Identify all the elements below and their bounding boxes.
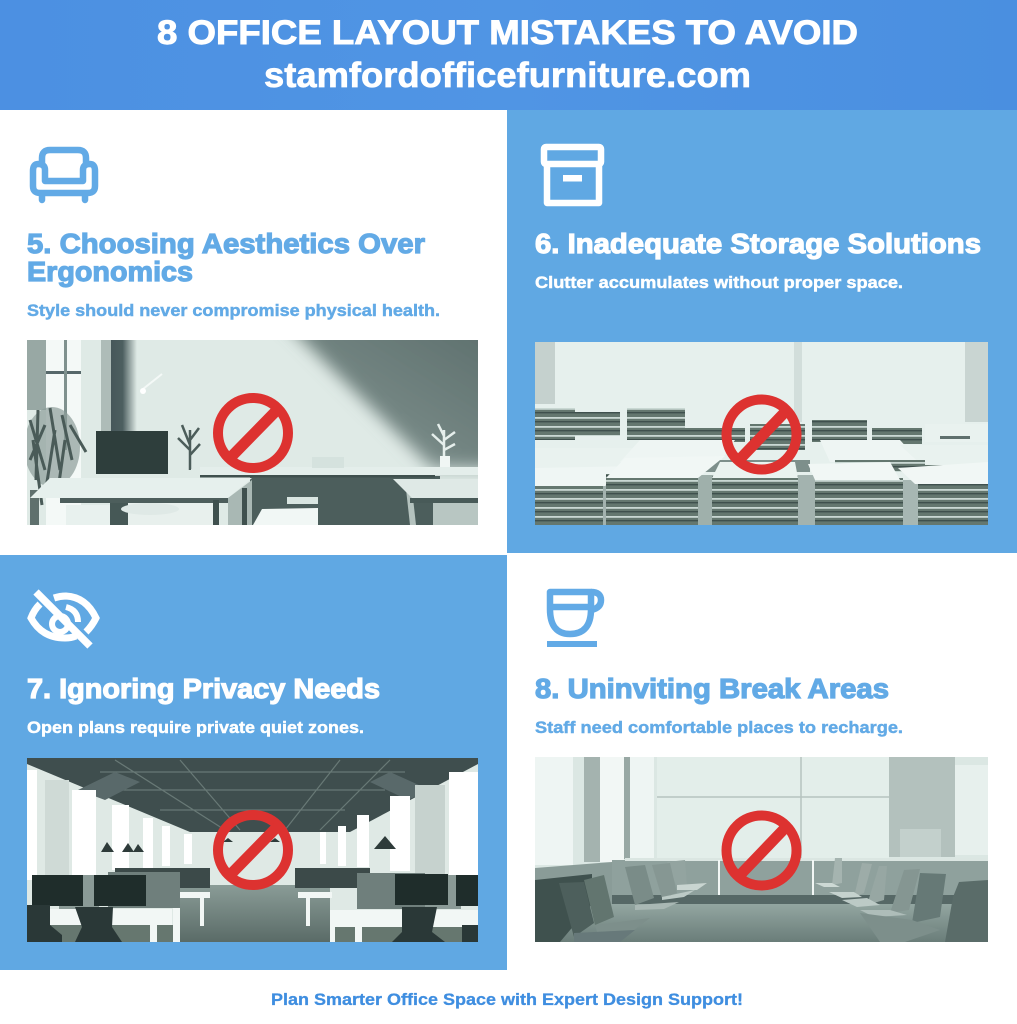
middle sheets xyxy=(535,448,660,470)
heading: 5. Choosing Aesthetics Over xyxy=(27,228,425,259)
desks xyxy=(48,909,172,925)
chairs left xyxy=(559,860,707,942)
panel: mistake 5 xyxy=(0,110,530,555)
monitor xyxy=(96,431,168,474)
windows xyxy=(27,770,478,880)
panel: mistake 6 xyxy=(507,110,1017,553)
heading: Ergonomics xyxy=(27,256,193,287)
heading xyxy=(27,228,425,287)
panel: mistake 7 xyxy=(0,555,507,970)
floor xyxy=(560,904,988,942)
title: 8 OFFICE LAYOUT MISTAKES TO AVOID xyxy=(157,14,858,52)
icon: prohibition sign xyxy=(726,400,796,470)
main desk xyxy=(128,503,213,525)
website address: stamfordofficefurniture.com xyxy=(264,56,751,95)
description: Style should never compromise physical health. xyxy=(27,301,440,320)
vase and plant xyxy=(178,425,200,470)
photo: open plan office xyxy=(27,758,478,942)
icon: armchair xyxy=(33,150,95,200)
gaps between stacks xyxy=(600,480,610,525)
photo: paper stacks xyxy=(535,342,988,525)
right desk xyxy=(393,479,478,498)
floor xyxy=(27,925,478,942)
heading: 7. Ignoring Privacy Needs xyxy=(27,673,380,704)
photo: break room xyxy=(535,757,988,942)
chairs xyxy=(27,905,478,942)
long counter and dark underside xyxy=(250,476,440,525)
panel: mistake 8 xyxy=(507,555,1017,970)
icon: coffee cup xyxy=(547,592,601,647)
header banner xyxy=(0,0,1017,110)
counter and lower wall xyxy=(612,860,988,904)
front stacks xyxy=(535,484,603,525)
description: Staff need comfortable places to recharge. xyxy=(535,718,903,737)
pendant lights xyxy=(101,836,396,852)
lamp xyxy=(143,374,162,389)
ceiling xyxy=(27,758,478,832)
plant xyxy=(24,407,86,525)
icon: prohibition sign xyxy=(218,398,288,468)
description: Clutter accumulates without proper space. xyxy=(535,273,903,292)
icon: prohibition sign xyxy=(218,815,288,885)
description: Open plans require private quiet zones. xyxy=(27,718,364,737)
screens xyxy=(115,868,210,888)
heading: 8. Uninviting Break Areas xyxy=(535,673,889,704)
heading: 6. Inadequate Storage Solutions xyxy=(535,228,981,259)
back stacks xyxy=(535,408,575,440)
footer call to action: Plan Smarter Office Space with Expert Design Support! xyxy=(271,990,743,1009)
chairs right xyxy=(815,858,988,942)
icon: crossed-out eye xyxy=(31,592,96,646)
icon: storage box xyxy=(544,147,601,203)
icon: prohibition sign xyxy=(726,816,796,886)
photo: minimalist office xyxy=(27,340,478,525)
